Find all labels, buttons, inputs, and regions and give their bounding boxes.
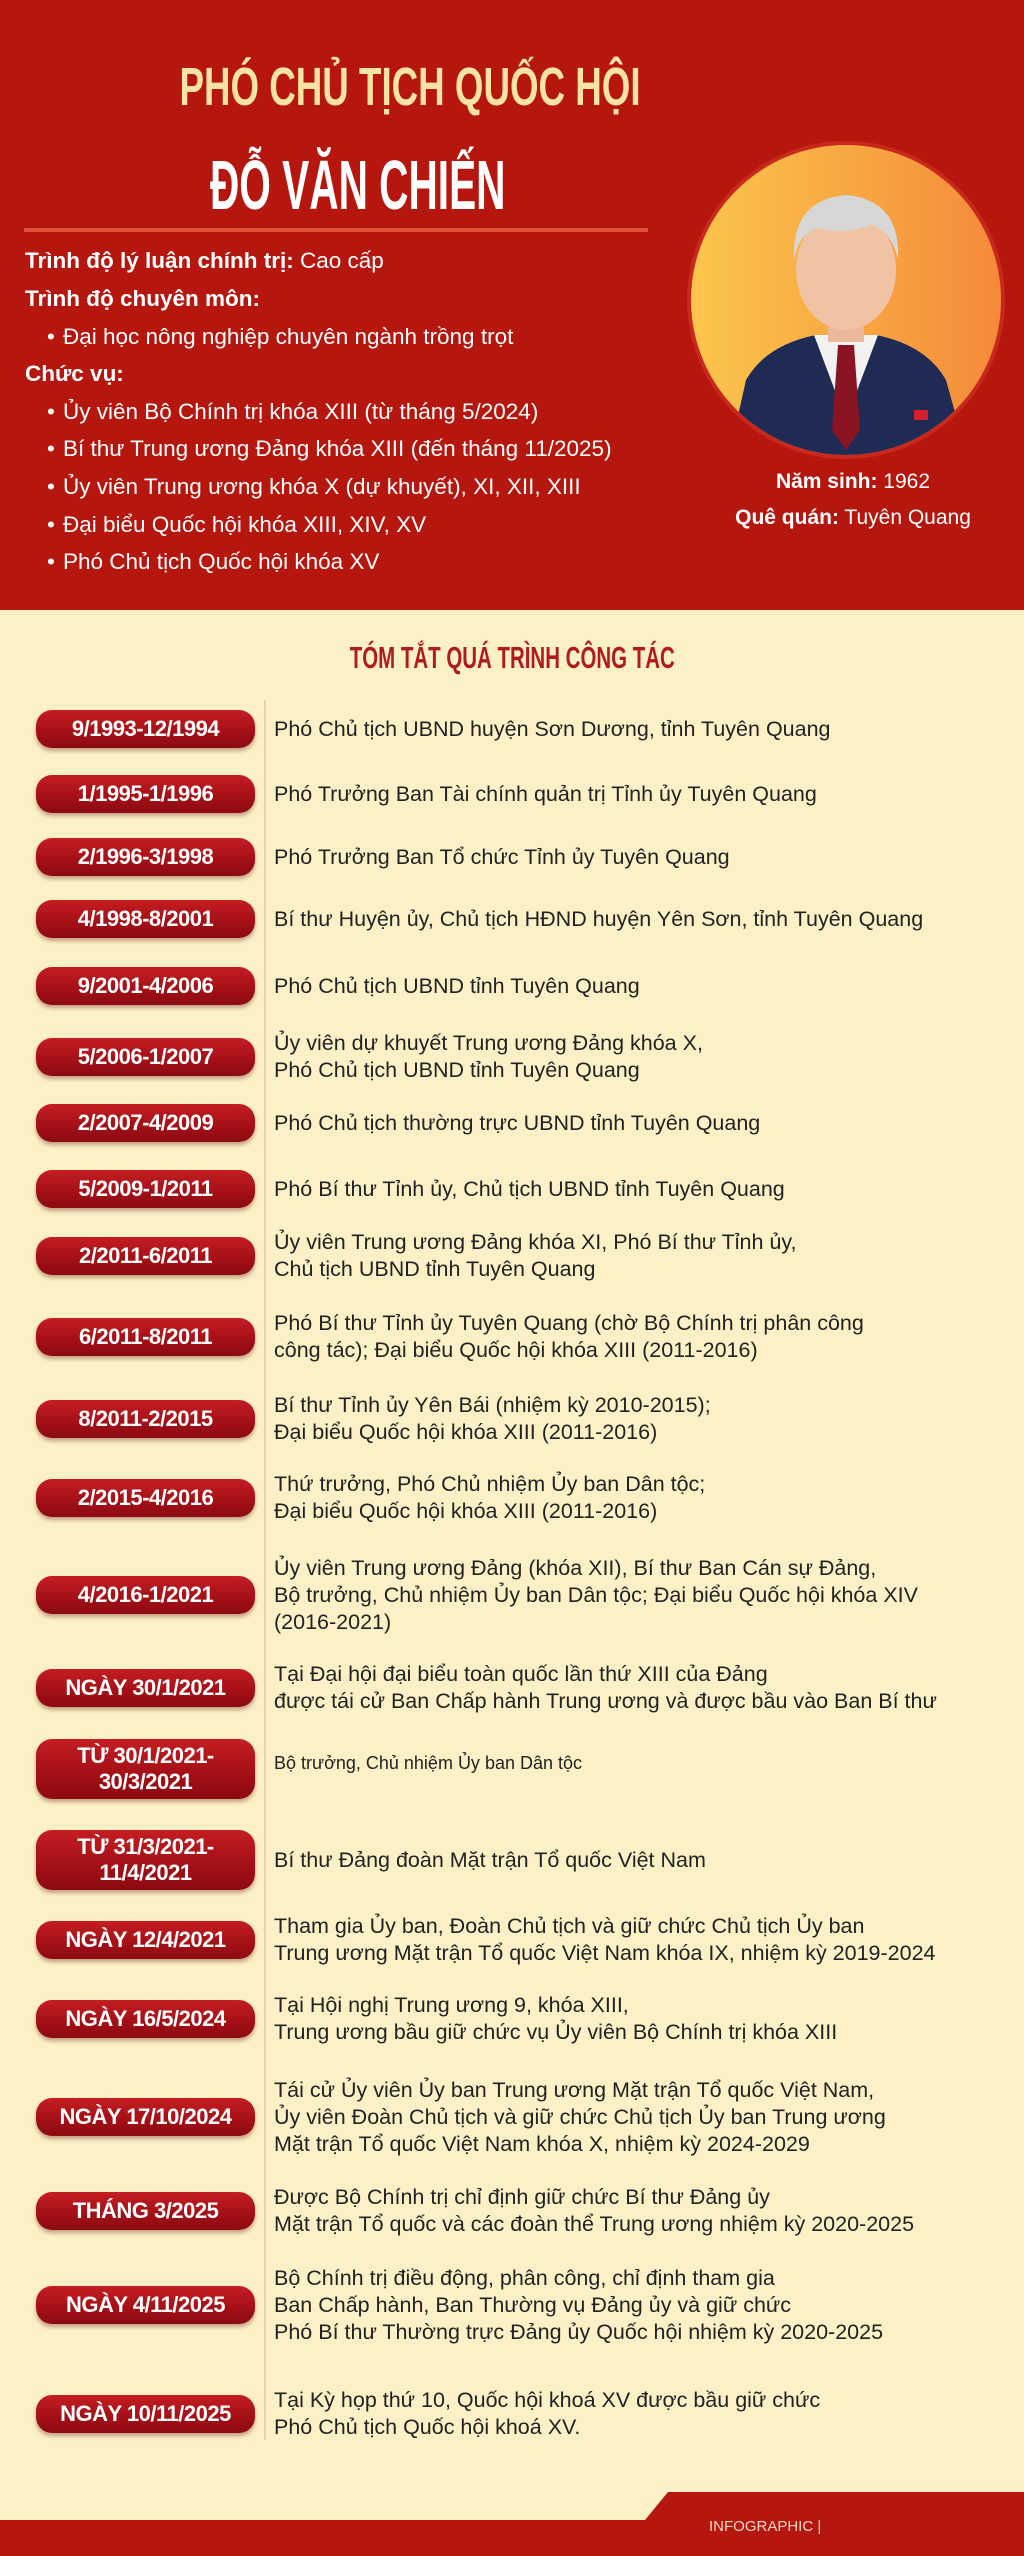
header panel xyxy=(0,0,1024,610)
item 14: được tái cử Ban Chấp hành Trung ương và được bầu vào Ban Bí thư xyxy=(274,1689,937,1713)
item 14 xyxy=(33,1662,937,1713)
item 22: Phó Chủ tịch Quốc hội khoá XV. xyxy=(274,2415,580,2439)
item 22 xyxy=(33,2388,820,2439)
item 16 xyxy=(33,1830,706,1896)
item 15: 30/3/2021 xyxy=(99,1769,192,1794)
info text block: Chức vụ: xyxy=(25,361,124,386)
item 15: Bộ trưởng, Chủ nhiệm Ủy ban Dân tộc xyxy=(274,1752,582,1772)
item 5 xyxy=(33,967,640,1011)
item 9: Ủy viên Trung ương Đảng khóa XI, Phó Bí thư Tỉnh ủy, xyxy=(274,1230,797,1254)
item 7: Phó Chủ tịch thường trực UBND tỉnh Tuyên Quang xyxy=(274,1110,760,1134)
item 15: TỪ 30/1/2021- xyxy=(77,1743,214,1768)
info text block: Trình độ chuyên môn: xyxy=(25,286,260,311)
item 20: THÁNG 3/2025 xyxy=(73,2198,218,2223)
item 6: Ủy viên dự khuyết Trung ương Đảng khóa X, xyxy=(274,1031,703,1055)
item 14: NGÀY 30/1/2021 xyxy=(65,1675,226,1700)
item 12: 2/2015-4/2016 xyxy=(78,1485,213,1510)
item 2: 1/1995-1/1996 xyxy=(78,781,213,806)
footer label: INFOGRAPHIC | xyxy=(709,2518,821,2535)
item 19: Mặt trận Tổ quốc Việt Nam khóa X, nhiệm kỳ 2024-2029 xyxy=(274,2132,810,2156)
item 13: Bộ trưởng, Chủ nhiệm Ủy ban Dân tộc; Đại biểu Quốc hội khóa XIV xyxy=(274,1582,918,1606)
title: PHÓ CHỦ TỊCH QUỐC HỘI xyxy=(179,57,641,117)
birth info xyxy=(735,470,971,529)
item 13: (2016-2021) xyxy=(274,1610,391,1634)
item 10 xyxy=(33,1311,864,1362)
item 19: Tái cử Ủy viên Ủy ban Trung ương Mặt trận Tổ quốc Việt Nam, xyxy=(274,2078,874,2102)
item 16: 11/4/2021 xyxy=(99,1860,192,1885)
item 4 xyxy=(33,900,923,944)
item 4: Bí thư Huyện ủy, Chủ tịch HĐND huyện Yên Sơn, tỉnh Tuyên Quang xyxy=(274,906,923,930)
item 1 xyxy=(33,710,831,754)
timeline xyxy=(33,710,937,2439)
info text block: Đại biểu Quốc hội khóa XIII, XIV, XV xyxy=(63,512,426,537)
item 17: NGÀY 12/4/2021 xyxy=(65,1927,226,1952)
item 13: Ủy viên Trung ương Đảng (khóa XII), Bí thư Ban Cán sự Đảng, xyxy=(274,1556,876,1580)
item 16: Bí thư Đảng đoàn Mặt trận Tổ quốc Việt Nam xyxy=(274,1848,706,1872)
item 1: 9/1993-12/1994 xyxy=(72,716,219,741)
item 11 xyxy=(33,1393,711,1444)
section heading: TÓM TẮT QUÁ TRÌNH CÔNG TÁC xyxy=(349,640,675,675)
info text block: Bí thư Trung ương Đảng khóa XIII (đến tháng 11/2025) xyxy=(63,436,612,461)
item 18: Tại Hội nghị Trung ương 9, khóa XIII, xyxy=(274,1993,629,2017)
item 5: 9/2001-4/2006 xyxy=(78,973,213,998)
item 21: Ban Chấp hành, Ban Thường vụ Đảng ủy và giữ chức xyxy=(274,2292,791,2316)
item 12 xyxy=(33,1472,705,1523)
info text block: Phó Chủ tịch Quốc hội khóa XV xyxy=(63,549,379,574)
portrait photo xyxy=(687,141,1005,459)
item 1: Phó Chủ tịch UBND huyện Sơn Dương, tỉnh Tuyên Quang xyxy=(274,716,831,740)
item 17 xyxy=(33,1914,936,1965)
item 22: Tại Kỳ họp thứ 10, Quốc hội khoá XV được bầu giữ chức xyxy=(274,2388,820,2412)
info text block: Ủy viên Trung ương khóa X (dự khuyết), XI, XII, XIII xyxy=(63,474,581,499)
footer band xyxy=(0,2492,1024,2556)
item 10: công tác); Đại biểu Quốc hội khóa XIII (2011-2016) xyxy=(274,1338,758,1362)
item 12: Đại biểu Quốc hội khóa XIII (2011-2016) xyxy=(274,1499,657,1523)
item 2 xyxy=(33,775,817,819)
item 2: Phó Trưởng Ban Tài chính quản trị Tỉnh ủy Tuyên Quang xyxy=(274,782,817,806)
item 8 xyxy=(33,1170,785,1214)
item 22: NGÀY 10/11/2025 xyxy=(60,2401,231,2426)
item 7: 2/2007-4/2009 xyxy=(78,1110,213,1135)
item 19: Ủy viên Đoàn Chủ tịch và giữ chức Chủ tịch Ủy ban Trung ương xyxy=(274,2104,886,2128)
item 21: NGÀY 4/11/2025 xyxy=(66,2292,225,2317)
item 4: 4/1998-8/2001 xyxy=(78,906,213,931)
item 3 xyxy=(33,838,730,882)
item 15 xyxy=(33,1739,582,1805)
item 11: Bí thư Tỉnh ủy Yên Bái (nhiệm kỳ 2010-2015); xyxy=(274,1393,711,1417)
item 6 xyxy=(33,1030,703,1082)
item 9 xyxy=(33,1230,797,1281)
item 3: 2/1996-3/1998 xyxy=(78,844,213,869)
item 10: 6/2011-8/2011 xyxy=(79,1324,212,1349)
item 20: Được Bộ Chính trị chỉ định giữ chức Bí thư Đảng ủy xyxy=(274,2185,770,2209)
birth info: Năm sinh: 1962 xyxy=(776,470,930,493)
item 11: Đại biểu Quốc hội khóa XIII (2011-2016) xyxy=(274,1420,657,1444)
item 10: Phó Bí thư Tỉnh ủy Tuyên Quang (chờ Bộ Chính trị phân công xyxy=(274,1311,864,1335)
item 18: NGÀY 16/5/2024 xyxy=(65,2006,226,2031)
info text block xyxy=(25,248,612,574)
birth info: Quê quán: Tuyên Quang xyxy=(735,506,971,529)
item 17: Tham gia Ủy ban, Đoàn Chủ tịch và giữ chức Chủ tịch Ủy ban xyxy=(274,1914,864,1938)
name: ĐỖ VĂN CHIẾN xyxy=(210,146,506,224)
item 12: Thứ trưởng, Phó Chủ nhiệm Ủy ban Dân tộc; xyxy=(274,1472,705,1496)
item 11: 8/2011-2/2015 xyxy=(78,1406,213,1431)
item 20 xyxy=(33,2185,914,2236)
item 7 xyxy=(33,1104,760,1148)
item 19: NGÀY 17/10/2024 xyxy=(60,2104,231,2129)
item 8: Phó Bí thư Tỉnh ủy, Chủ tịch UBND tỉnh Tuyên Quang xyxy=(274,1176,785,1200)
item 17: Trung ương Mặt trận Tổ quốc Việt Nam khóa IX, nhiệm kỳ 2019-2024 xyxy=(274,1941,936,1965)
item 21: Bộ Chính trị điều động, phân công, chỉ định tham gia xyxy=(274,2266,775,2290)
item 3: Phó Trưởng Ban Tổ chức Tỉnh ủy Tuyên Quang xyxy=(274,844,730,868)
item 21 xyxy=(33,2266,883,2344)
item 18 xyxy=(33,1993,837,2044)
item 20: Mặt trận Tổ quốc và các đoàn thể Trung ương nhiệm kỳ 2020-2025 xyxy=(274,2212,914,2236)
info text block: Trình độ lý luận chính trị: Cao cấp xyxy=(25,248,384,273)
item 18: Trung ương bầu giữ chức vụ Ủy viên Bộ Chính trị khóa XIII xyxy=(274,2020,837,2044)
item 13: 4/2016-1/2021 xyxy=(78,1582,213,1607)
item 21: Phó Bí thư Thường trực Đảng ủy Quốc hội nhiệm kỳ 2020-2025 xyxy=(274,2320,883,2344)
item 14: Tại Đại hội đại biểu toàn quốc lần thứ XIII của Đảng xyxy=(274,1662,768,1686)
item 8: 5/2009-1/2011 xyxy=(78,1176,213,1201)
info text block: Ủy viên Bộ Chính trị khóa XIII (từ tháng 5/2024) xyxy=(63,399,538,424)
item 9: 2/2011-6/2011 xyxy=(79,1243,212,1268)
item 13 xyxy=(33,1556,918,1634)
item 16: TỪ 31/3/2021- xyxy=(77,1834,214,1859)
item 6: 5/2006-1/2007 xyxy=(78,1044,213,1069)
item 5: Phó Chủ tịch UBND tỉnh Tuyên Quang xyxy=(274,974,640,998)
info text block: Đại học nông nghiệp chuyên ngành trồng trọt xyxy=(63,324,513,349)
item 6: Phó Chủ tịch UBND tỉnh Tuyên Quang xyxy=(274,1058,640,1082)
item 9: Chủ tịch UBND tỉnh Tuyên Quang xyxy=(274,1257,595,1281)
item 19 xyxy=(33,2078,886,2156)
